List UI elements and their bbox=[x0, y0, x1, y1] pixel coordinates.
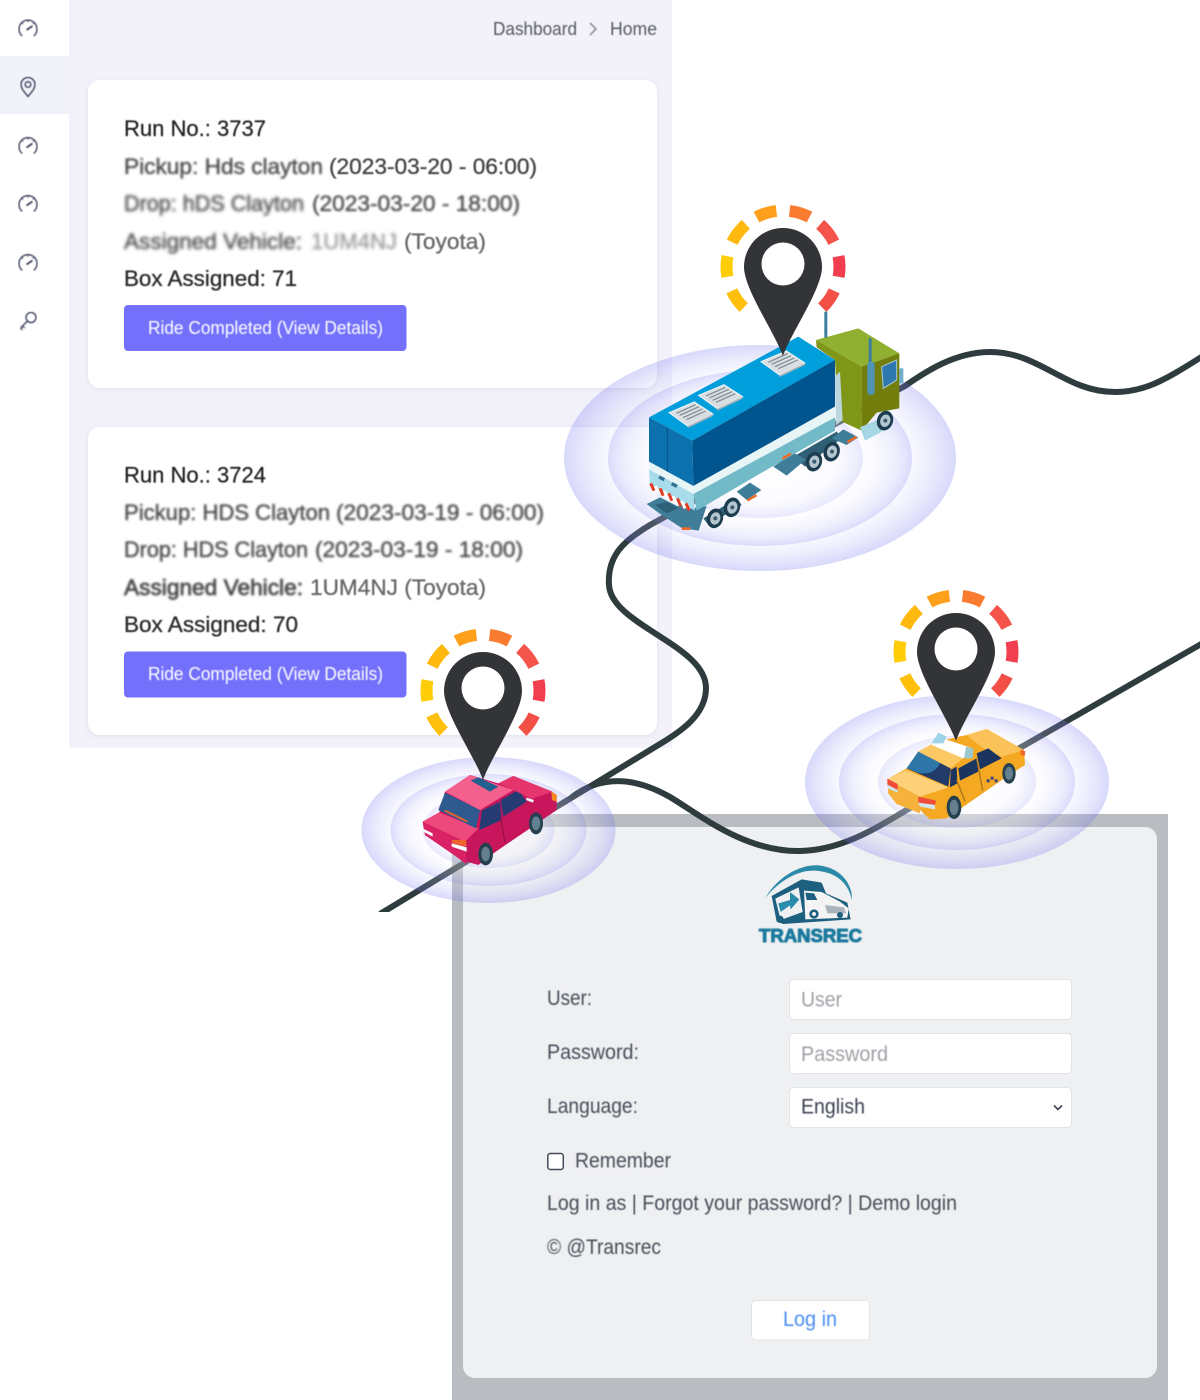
button: log in bbox=[752, 1300, 870, 1340]
icon: gauge 2 bbox=[19, 138, 37, 153]
breadcrumb: Dashboard bbox=[493, 19, 577, 39]
button: ride completed 2 bbox=[124, 652, 406, 698]
panel: run 3737 card: 1UM4NJ bbox=[311, 229, 397, 254]
icon: taxi location pin bbox=[900, 596, 1012, 741]
truck wheels bbox=[704, 409, 896, 530]
sidebar bbox=[0, 0, 69, 748]
panel: run 3724 card: Run No.: 3724 bbox=[124, 462, 266, 488]
select: language: English bbox=[801, 1096, 865, 1118]
select: language bbox=[790, 1088, 1072, 1128]
panel: run 3724 card bbox=[88, 427, 657, 735]
input: user: User bbox=[801, 988, 842, 1012]
login form: Password: bbox=[547, 1041, 639, 1064]
breadcrumb bbox=[493, 19, 657, 39]
login form: Language: bbox=[547, 1095, 638, 1118]
panel: run 3737 card: (2023-03-20 - 18:00) bbox=[312, 191, 520, 216]
icon: roof vent front bbox=[761, 351, 805, 377]
icon: car location pin bbox=[427, 635, 539, 780]
input: password: Password bbox=[801, 1043, 888, 1066]
signal rings: car bbox=[362, 757, 616, 903]
icon: truck location pin bbox=[727, 211, 839, 356]
illustration: truck bbox=[647, 312, 903, 531]
panel: run 3724 card: Pickup: HDS Clayton bbox=[124, 500, 330, 525]
button: ride completed: Ride Completed (View Details) bbox=[148, 318, 383, 338]
panel: run 3737 card: (2023-03-20 - 06:00) bbox=[329, 154, 537, 179]
signal rings: taxi bbox=[805, 695, 1109, 869]
button: ride completed 2: Ride Completed (View Details) bbox=[148, 664, 383, 684]
illustration: car bbox=[423, 775, 557, 865]
panel: dashboard bbox=[69, 0, 672, 748]
copyright: © @Transrec bbox=[547, 1236, 661, 1259]
route lines bbox=[380, 352, 1200, 914]
icon: gauge 1 bbox=[19, 20, 37, 36]
checkbox: remember: Remember bbox=[575, 1150, 671, 1172]
login form bbox=[547, 980, 1072, 1340]
links: Log in as | Forgot your password? | Demo login bbox=[547, 1192, 957, 1215]
icon: gauge 3 bbox=[19, 196, 37, 211]
icon: gauge 4 bbox=[19, 254, 37, 270]
panel: run 3724 card: Box Assigned: 70 bbox=[124, 612, 298, 637]
input: password bbox=[790, 1034, 1072, 1074]
icon: roof vent middle bbox=[699, 385, 743, 411]
icon: key bbox=[20, 312, 36, 330]
button: log in: Log in bbox=[783, 1308, 837, 1331]
panel: run 3737 card: (Toyota) bbox=[404, 229, 486, 254]
login form: User: bbox=[547, 987, 592, 1010]
breadcrumb: Home bbox=[610, 19, 657, 39]
panel: run 3724 card: Assigned Vehicle: bbox=[124, 575, 303, 600]
panel: run 3724 card: 1UM4NJ (Toyota) bbox=[310, 575, 486, 600]
signal rings: truck bbox=[564, 345, 956, 571]
icon: location pin bbox=[21, 78, 35, 96]
panel: run 3737 card bbox=[88, 80, 657, 388]
panel: run 3737 card: Assigned Vehicle: bbox=[124, 229, 302, 254]
panel: run 3737 card: Box Assigned: 71 bbox=[124, 266, 297, 291]
panel: run 3737 card: Pickup: Hds clayton bbox=[124, 154, 323, 179]
input: user bbox=[790, 980, 1072, 1020]
logo: Transrec bbox=[759, 865, 862, 946]
panel: login bbox=[452, 814, 1168, 1400]
panel: run 3724 card: (2023-03-19 - 06:00) bbox=[336, 500, 544, 525]
icon: roof vent rear bbox=[669, 402, 713, 428]
button: ride completed bbox=[124, 305, 406, 351]
panel: run 3724 card: Drop: HDS Clayton bbox=[124, 537, 308, 562]
panel: run 3737 card: Drop: hDS Clayton bbox=[124, 191, 304, 216]
panel: run 3724 card: (2023-03-19 - 18:00) bbox=[315, 537, 523, 562]
logo: Transrec: TRANSREC bbox=[759, 926, 862, 946]
panel: run 3737 card: Run No.: 3737 bbox=[124, 116, 266, 141]
illustration: taxi bbox=[887, 729, 1025, 819]
